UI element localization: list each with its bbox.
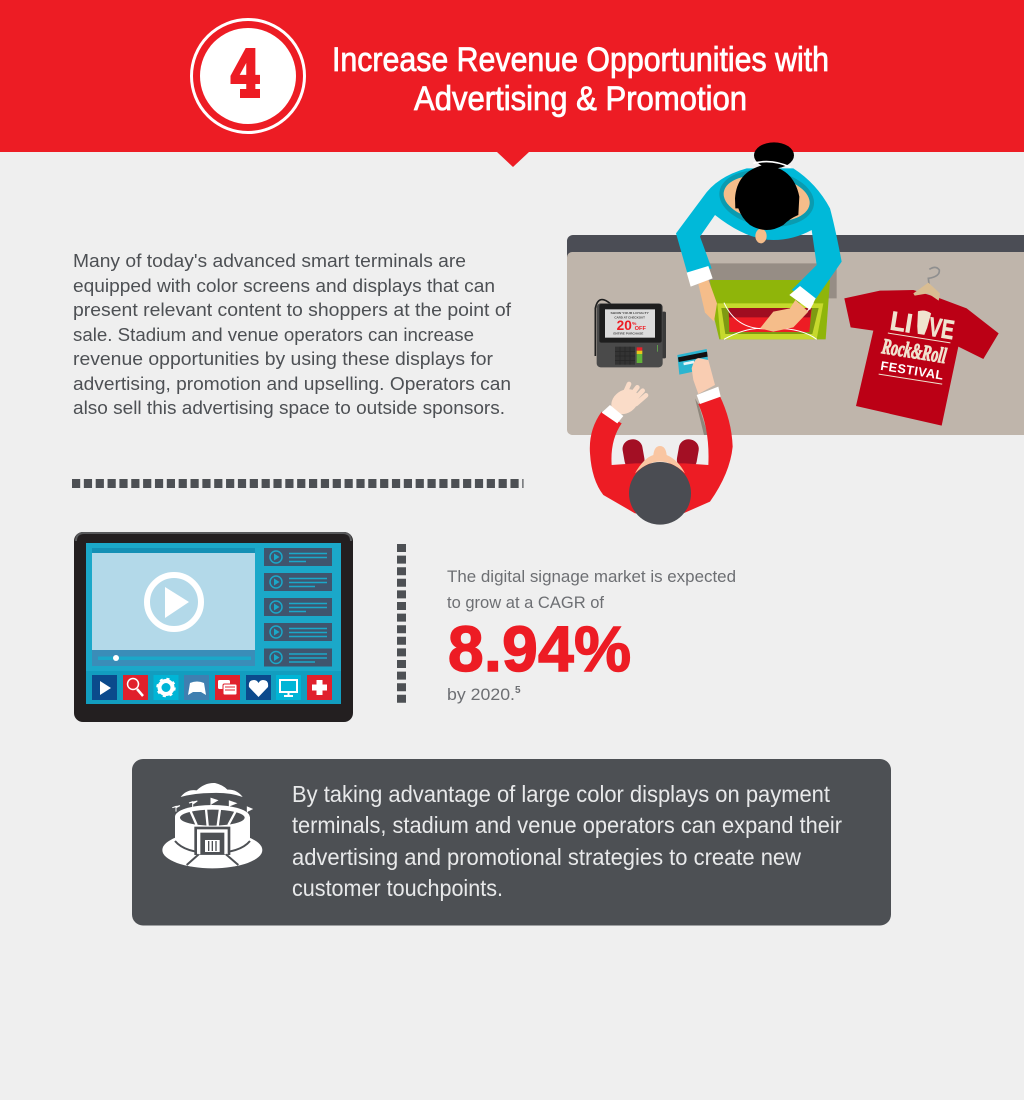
shopping bag bbox=[708, 263, 837, 339]
intro paragraph: also sell this advertising space to outside sponsors. bbox=[73, 398, 505, 418]
callout text: By taking advantage of large color displays on payment bbox=[292, 781, 831, 807]
intro paragraph: sale. Stadium and venue operators can increase bbox=[73, 325, 474, 345]
counter bbox=[567, 235, 1024, 435]
video player bbox=[92, 553, 255, 666]
number badge bbox=[192, 20, 304, 132]
payment terminal: % bbox=[632, 321, 637, 327]
statistic: digital signage CAGR: by 2020. bbox=[447, 685, 515, 704]
intro paragraph: present relevant content to shoppers at the point of bbox=[73, 300, 512, 320]
intro paragraph: advertising, promotion and upselling. Operators can bbox=[73, 374, 511, 394]
title bbox=[332, 41, 829, 118]
payment terminal: ENTIRE PURCHASE bbox=[613, 332, 643, 336]
number badge: 4 bbox=[231, 37, 260, 104]
header banner bbox=[0, 0, 1024, 167]
payment terminal: CARD AT CHECKOUT bbox=[614, 315, 645, 319]
title: Advertising & Promotion bbox=[414, 80, 747, 118]
intro paragraph bbox=[73, 251, 512, 418]
title: Increase Revenue Opportunities with bbox=[332, 41, 829, 79]
t-shirt: VE bbox=[927, 312, 956, 345]
intro paragraph: equipped with color screens and displays that can bbox=[73, 276, 495, 296]
illustration: counter with cashier and customer bbox=[567, 142, 1024, 525]
icon: stadium bbox=[162, 783, 262, 868]
t-shirt: LI bbox=[888, 306, 915, 339]
panel: callout bbox=[132, 759, 891, 926]
statistic: digital signage CAGR: to grow at a CAGR of bbox=[447, 593, 604, 612]
icon: tablet with digital signage bbox=[74, 532, 353, 722]
statistic: digital signage CAGR: The digital signage market is expected bbox=[447, 567, 736, 586]
t-shirt bbox=[844, 267, 999, 426]
payment terminal: 20 bbox=[617, 318, 632, 333]
callout text bbox=[292, 781, 842, 901]
statistic: digital signage CAGR: 5 bbox=[515, 685, 521, 696]
payment terminal bbox=[595, 300, 666, 367]
callout text: terminals, stadium and venue operators can expand their bbox=[292, 812, 842, 838]
statistic: digital signage CAGR: 8.94% bbox=[448, 613, 631, 685]
callout text: customer touchpoints. bbox=[292, 875, 503, 901]
payment terminal: SHOW YOUR LOYALTY bbox=[610, 311, 649, 315]
intro paragraph: Many of today's advanced smart terminals are bbox=[73, 251, 466, 271]
app icons bbox=[92, 675, 332, 700]
intro paragraph: revenue opportunities by using these displays for bbox=[73, 349, 493, 369]
playlist bbox=[264, 548, 332, 666]
t-shirt: Rock&Roll bbox=[880, 333, 949, 368]
statistic: digital signage CAGR bbox=[447, 567, 736, 704]
customer bbox=[590, 349, 733, 525]
callout text: advertising and promotional strategies to create new bbox=[292, 844, 802, 870]
t-shirt: FESTIVAL bbox=[880, 359, 945, 383]
payment terminal: OFF bbox=[635, 326, 647, 332]
cashier bbox=[676, 142, 842, 332]
